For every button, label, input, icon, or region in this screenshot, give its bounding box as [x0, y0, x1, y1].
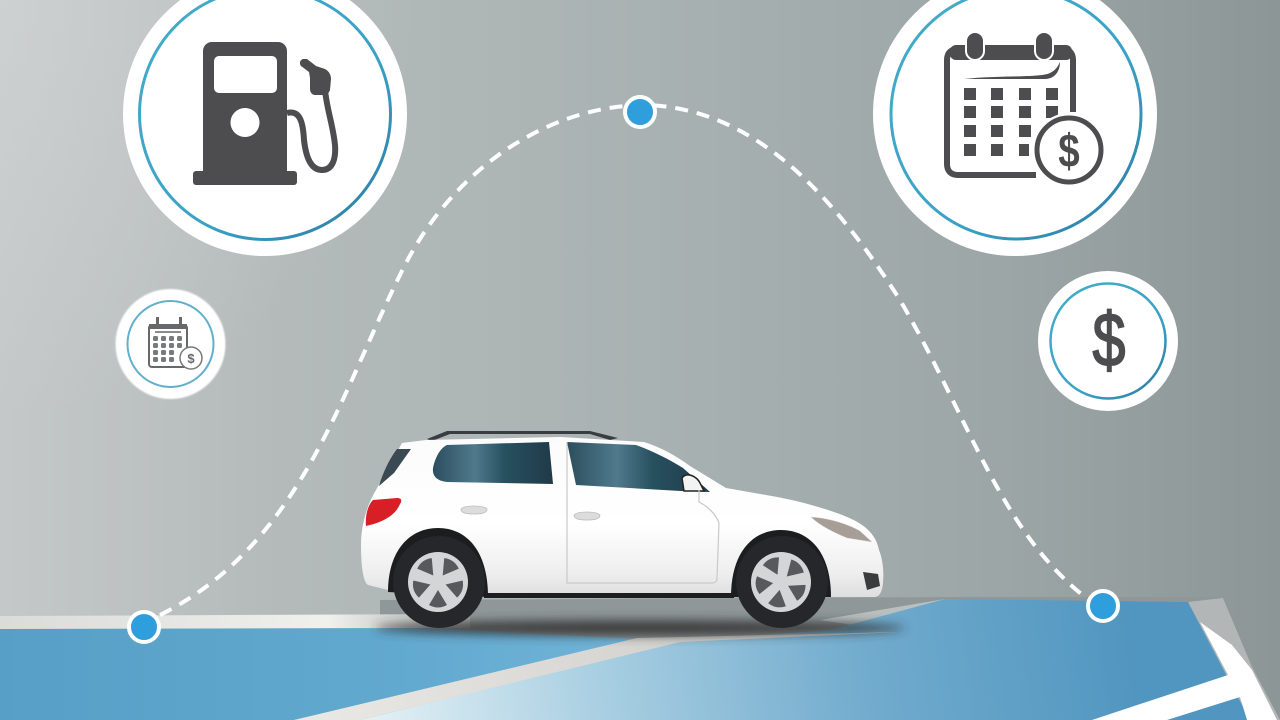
road: pale strip at right of car	[820, 599, 960, 626]
fuel pump badge	[123, 0, 407, 256]
calendar with dollar badge	[873, 0, 1157, 256]
car: rear quarter window	[379, 449, 411, 486]
car: rear wheel	[393, 536, 485, 628]
icon: fuel pump	[193, 42, 335, 185]
car: front wheel	[736, 536, 828, 628]
small calendar badge	[116, 289, 226, 399]
car	[361, 431, 883, 628]
route marker: peak	[625, 97, 655, 127]
car: headlight	[811, 517, 872, 542]
road: right blue section	[360, 599, 1250, 720]
car: body shell	[361, 437, 883, 597]
car ground shadow	[375, 620, 905, 636]
car: front door handle	[574, 512, 600, 520]
road: grey pavement behind car	[380, 597, 1280, 720]
car: front wheel arch	[731, 530, 831, 597]
car: front grille	[863, 572, 880, 590]
car: rear door handle	[461, 506, 487, 514]
car: tail light	[366, 498, 401, 526]
car: door lines	[567, 442, 719, 583]
icon: calendar with dollar coin	[947, 32, 1106, 187]
dollar badge	[1038, 271, 1178, 411]
icon: small calendar: $	[187, 351, 195, 366]
icon: dollar sign: $	[1093, 298, 1125, 383]
car: rear window	[433, 442, 553, 484]
car: underside	[484, 592, 734, 598]
road: diagonal light band	[294, 632, 900, 720]
car: front window	[567, 442, 710, 492]
car: roof rail	[427, 431, 618, 441]
road: grey corner edge	[1188, 598, 1280, 720]
road: left blue section	[0, 628, 660, 720]
car: wing mirror	[682, 475, 704, 491]
icon: calendar with dollar coin: $	[1058, 125, 1080, 178]
road: white corner marking	[1092, 622, 1277, 720]
road surface	[0, 597, 1280, 720]
route marker: start	[129, 612, 159, 642]
road: light kerb strip	[0, 614, 470, 629]
dashed route curve	[160, 105, 1085, 615]
car: rear wheel arch	[388, 528, 488, 597]
route marker: end	[1088, 591, 1118, 621]
